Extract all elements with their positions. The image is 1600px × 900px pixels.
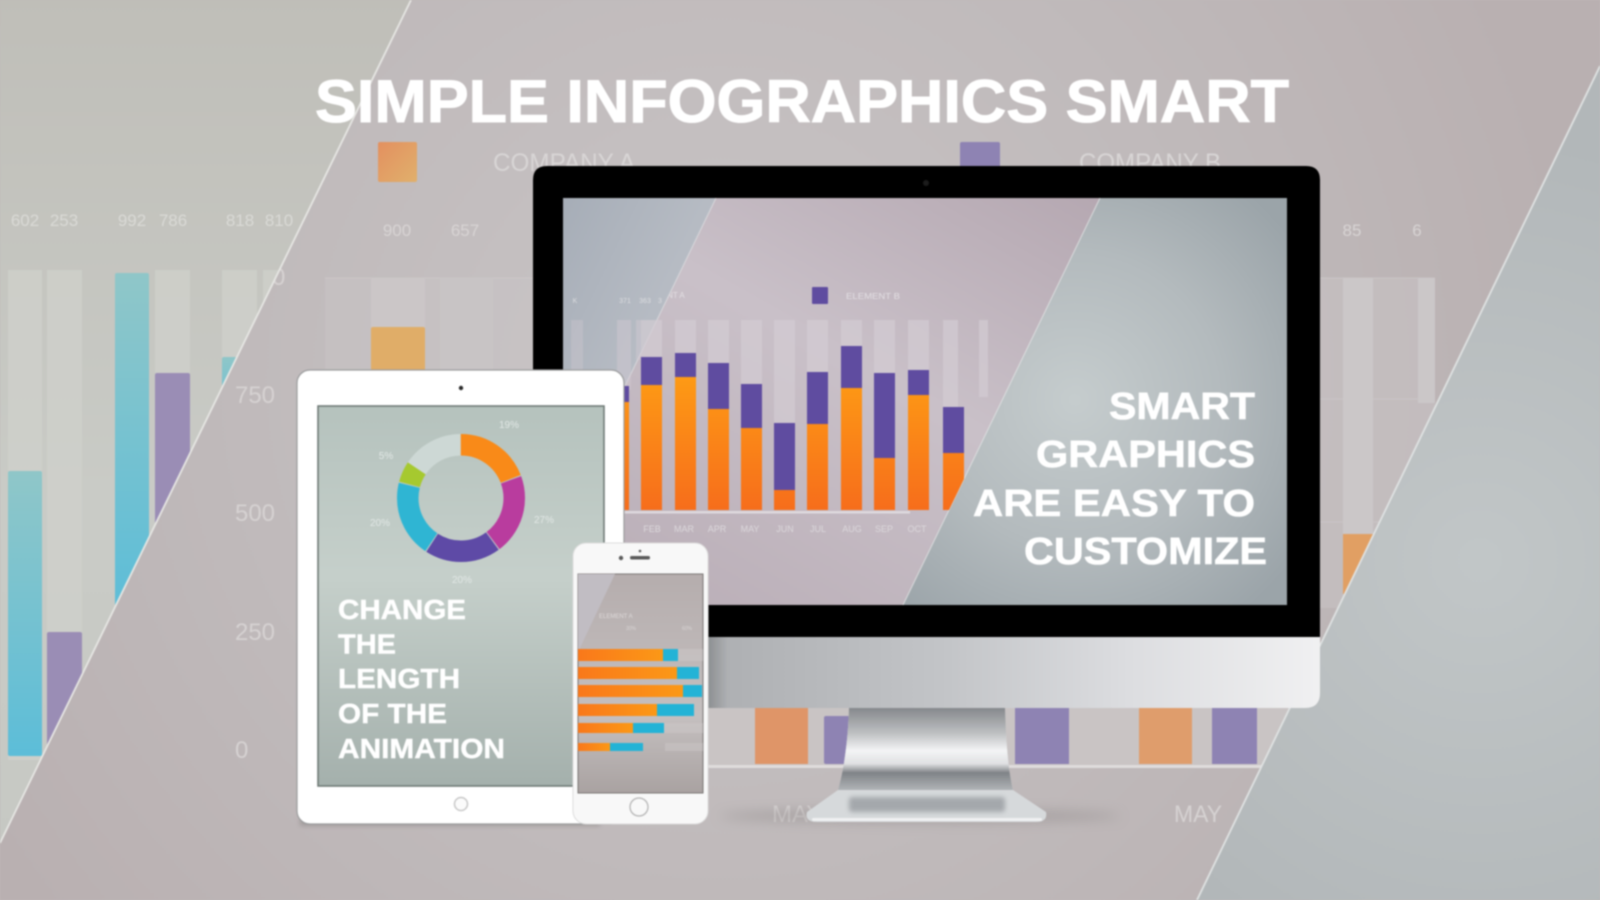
phone body	[573, 543, 708, 824]
screen legend: ELEMENT A	[640, 291, 685, 300]
screen text: CUSTOMIZE	[1024, 531, 1267, 573]
tablet text: ANIMATION	[338, 733, 505, 764]
phone screen	[578, 574, 703, 793]
monitor chin	[690, 637, 1320, 708]
monitor stand	[806, 708, 1046, 822]
chart: faded middle bar chart behind devices: 500	[235, 500, 275, 527]
screen bar chart	[571, 298, 988, 534]
screen text: SMART	[1109, 386, 1255, 428]
donut labels: 20%	[452, 575, 472, 586]
screen text: ARE EASY TO	[973, 483, 1255, 525]
chart: faded middle bar chart behind devices	[232, 142, 1435, 828]
screen bar chart: 3	[658, 298, 662, 305]
phone screen: 60%	[682, 626, 693, 632]
donut labels: 27%	[534, 515, 554, 526]
monitor bezel	[533, 166, 1320, 637]
chart: faded left bar chart: 810	[265, 211, 293, 230]
chart: faded left bar chart: 602	[11, 211, 39, 230]
tablet text: THE	[338, 628, 396, 660]
tablet text: CHANGE	[338, 594, 466, 625]
decorative diagonal edge: right	[1197, 66, 1600, 900]
monitor camera	[923, 180, 929, 186]
screen bar chart: 371	[619, 298, 631, 305]
phone horizontal bars	[578, 649, 702, 751]
screen bar chart: JUL	[810, 524, 826, 534]
chart: faded left bar chart: 786	[159, 211, 187, 230]
screen bar chart: APR	[708, 524, 727, 534]
tablet home button	[454, 798, 468, 810]
panel: left diagonal background	[0, 0, 411, 843]
chart: faded middle bar chart behind devices: MAY	[1174, 801, 1222, 828]
tablet camera	[459, 386, 463, 390]
screen bar chart: JUN	[776, 524, 794, 534]
phone screen: ELEMENT A	[599, 614, 633, 620]
donut labels: 19%	[499, 420, 519, 431]
phone home button	[630, 798, 648, 816]
tablet text: LENGTH	[338, 663, 460, 694]
screen bar chart: AUG	[842, 524, 862, 534]
screen bar chart: MAY	[741, 524, 759, 534]
chart: faded middle bar chart behind devices: 250	[235, 619, 275, 646]
chart: faded middle bar chart behind devices: MAY	[772, 801, 822, 828]
screen text	[973, 386, 1267, 573]
screen legend	[640, 287, 900, 304]
chart: faded middle bar chart behind devices: 85	[1343, 221, 1361, 240]
device: smartphone	[573, 543, 708, 824]
chart: faded middle bar chart behind devices: 1000	[232, 264, 285, 291]
chart: faded middle bar chart behind devices: 657	[451, 221, 479, 240]
chart: faded middle bar chart behind devices: 750	[235, 382, 275, 409]
device: desktop monitor	[519, 166, 1320, 822]
shadow: monitor base	[720, 810, 1120, 822]
chart: faded left bar chart: 818	[226, 211, 254, 230]
chart: faded left bar chart	[8, 211, 293, 762]
screen bar chart: OCT	[908, 524, 927, 534]
donut labels: 5%	[379, 451, 393, 462]
screen bar chart: K	[573, 298, 578, 305]
tablet text	[338, 594, 505, 764]
tablet text: OF THE	[338, 698, 447, 729]
title: SIMPLE INFOGRAPHICS SMART	[315, 68, 1289, 135]
chart: faded middle bar chart behind devices: COMPANY A	[493, 149, 635, 177]
chart: faded left bar chart: 253	[50, 211, 78, 230]
tablet shadow	[300, 818, 600, 826]
chart: faded middle bar chart behind devices: 900	[383, 221, 411, 240]
chart: faded middle bar chart behind devices: 6	[1412, 221, 1422, 240]
device: tablet	[297, 370, 624, 826]
screen legend: ELEMENT B	[846, 292, 900, 301]
decorative diagonal edge: left	[0, 0, 411, 843]
chart: faded middle bar chart behind devices: COMPANY B	[1079, 149, 1221, 177]
phone screen: 30%	[626, 626, 637, 632]
phone camera and speaker	[619, 550, 650, 560]
monitor screen	[519, 198, 1287, 605]
screen bar chart: FEB	[643, 524, 661, 534]
donut labels: 20%	[370, 518, 390, 529]
screen bar chart: 363	[639, 298, 651, 305]
donut labels	[370, 420, 554, 586]
chart: faded left bar chart: 992	[118, 211, 146, 230]
tablet body	[297, 370, 624, 824]
donut chart	[408, 445, 514, 551]
chart: faded middle bar chart behind devices: 0	[235, 737, 248, 764]
screen bar chart: SEP	[875, 524, 893, 534]
tablet screen	[318, 406, 604, 786]
screen text: GRAPHICS	[1036, 434, 1255, 476]
screen bar chart: MAR	[674, 524, 694, 534]
panel: right diagonal background	[1197, 66, 1600, 900]
